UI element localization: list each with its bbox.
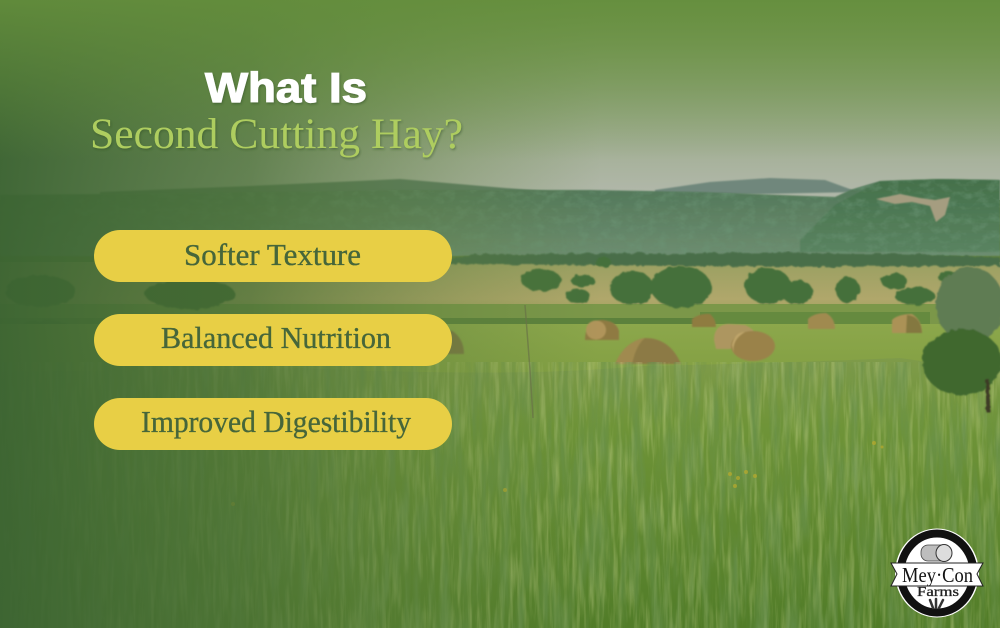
- trees: [1, 257, 958, 380]
- hay bale: [714, 324, 755, 349]
- right foreground bush: [922, 267, 1000, 412]
- hay bale: [692, 314, 716, 327]
- logo text: Farms: Farms: [917, 585, 959, 600]
- pill: Softer Texture: Softer Texture: [184, 237, 361, 272]
- distant ridges: [100, 178, 858, 196]
- icon: hay bale: [921, 544, 952, 562]
- wooded hills: [0, 179, 1000, 256]
- pill: Softer Texture: [94, 230, 452, 282]
- mown lawn: [0, 324, 1000, 374]
- pill: Balanced Nutrition: Balanced Nutrition: [161, 320, 391, 355]
- title line: Second Cutting Hay?: Second Cutting Hay?: [90, 111, 463, 158]
- hay bale: [808, 313, 835, 329]
- pill: Balanced Nutrition: [94, 314, 452, 366]
- logo: Mey-Con Farms: [891, 528, 983, 618]
- hay bale: [892, 314, 922, 333]
- pill: Improved Digestibility: Improved Digestibility: [141, 404, 411, 439]
- logo text: Mey-Con: Mey·Con: [902, 563, 973, 587]
- hillside quarry scar: [876, 194, 950, 222]
- sky: [0, 0, 1000, 200]
- hay bale: [585, 320, 619, 340]
- tan mid field: [0, 262, 1000, 324]
- title line: What Is: What Is: [205, 64, 367, 111]
- hedge band: [0, 304, 1000, 326]
- hay bale: [731, 331, 775, 361]
- hay bale: [615, 338, 681, 364]
- foreground grass: [0, 358, 1000, 628]
- icon: wheat: [930, 599, 943, 608]
- overlay: green gradient from top: [0, 0, 1000, 160]
- tree line: [440, 252, 1000, 267]
- hay bale: [444, 330, 464, 354]
- hill forest texture: [490, 180, 1000, 254]
- hay bales: [444, 313, 922, 364]
- title: [90, 64, 463, 158]
- bare sapling: [525, 305, 533, 418]
- yellow wildflowers: [231, 441, 884, 506]
- banner: [891, 563, 983, 586]
- pill: Improved Digestibility: [94, 398, 452, 450]
